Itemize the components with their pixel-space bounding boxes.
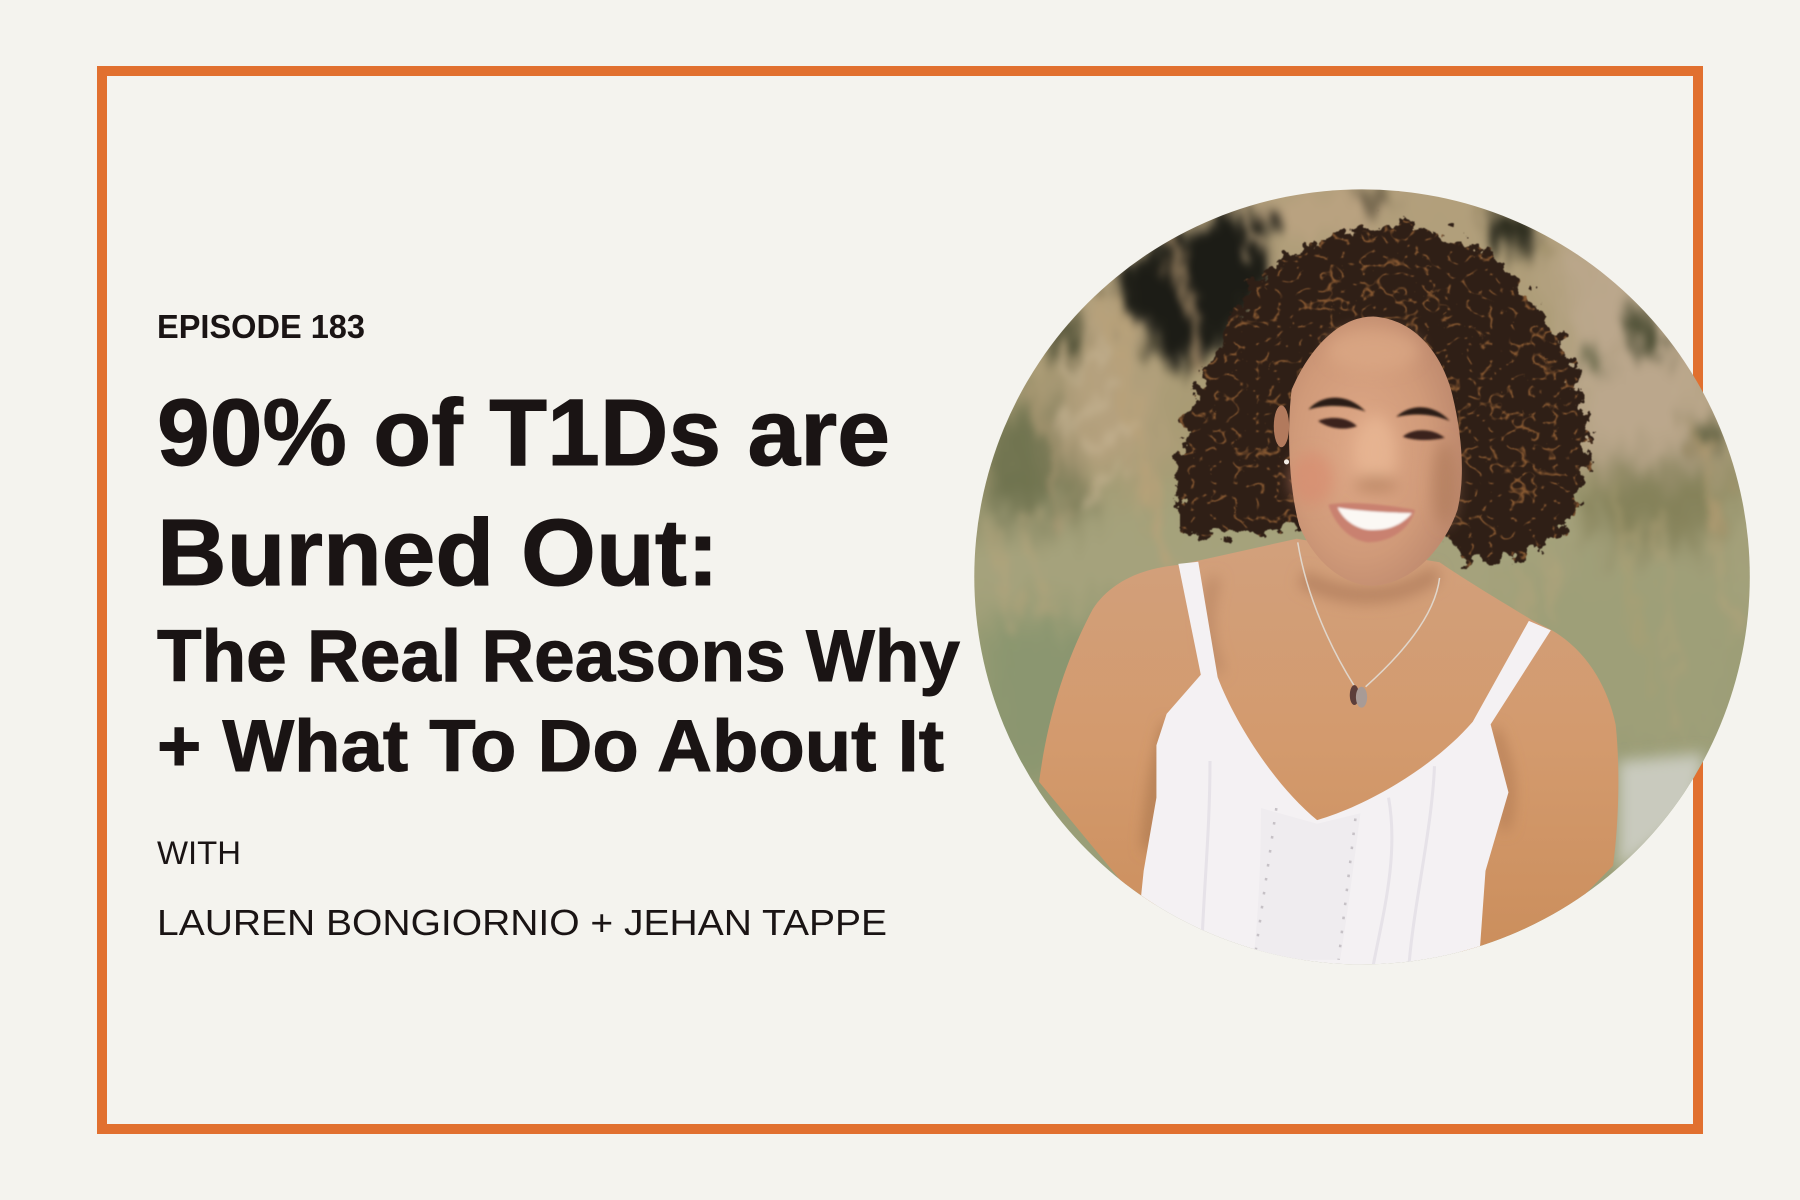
guest names: LAUREN BONGIORNIO + JEHAN TAPPE — [157, 902, 887, 943]
subtitle: The Real Reasons Why — [157, 616, 960, 697]
title — [157, 380, 890, 606]
face — [1289, 316, 1462, 586]
ear and earring — [1274, 405, 1289, 464]
eyebrows — [1308, 398, 1450, 421]
orange frame — [102, 71, 1698, 1129]
hair — [1177, 225, 1587, 563]
with label: WITH — [157, 835, 241, 871]
necklace — [1298, 542, 1440, 708]
arm shadows — [1149, 573, 1508, 850]
body skin — [1039, 539, 1618, 954]
title: 90% of T1Ds are — [157, 380, 890, 486]
title: Burned Out: — [157, 500, 719, 606]
pendant — [1350, 685, 1367, 708]
sand patch — [1618, 753, 1705, 871]
circular portrait photo — [974, 189, 1750, 964]
background grass stalks — [988, 206, 1742, 632]
episode label: EPISODE 183 — [157, 308, 365, 345]
blurred grass background — [974, 189, 1750, 964]
subtitle: + What To Do About It — [157, 706, 944, 787]
white dress — [1133, 562, 1551, 970]
cheek and nose shading — [1291, 330, 1457, 526]
subtitle — [157, 616, 960, 787]
smile — [1328, 503, 1415, 542]
eyes — [1318, 418, 1445, 440]
